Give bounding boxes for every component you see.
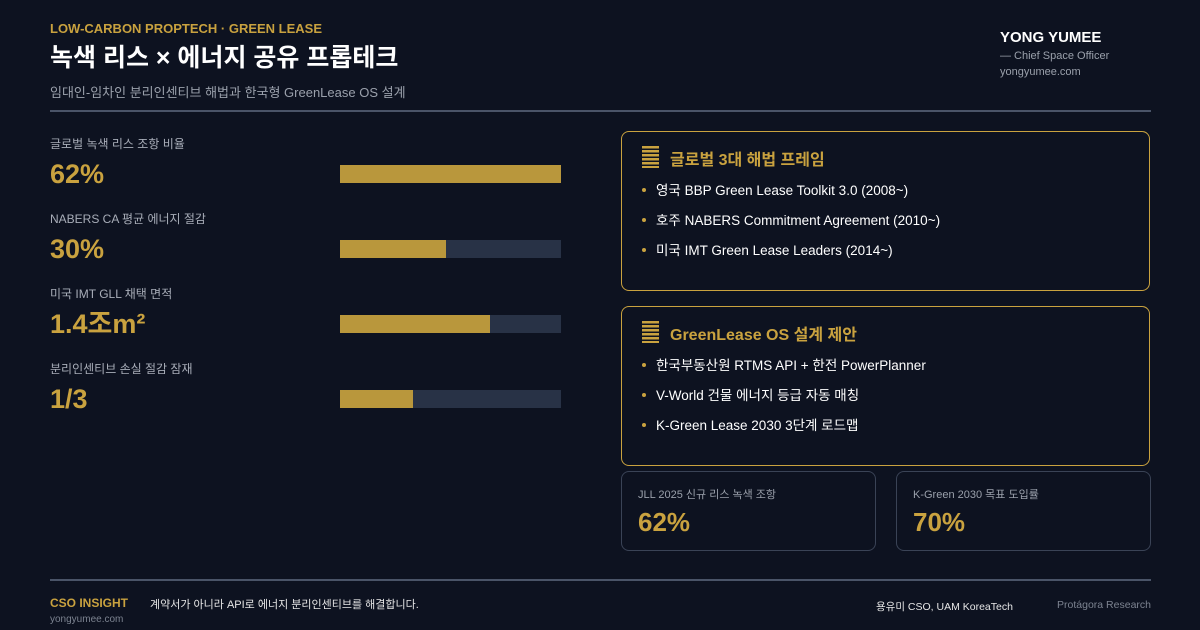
footer: Protágora Research: [1057, 599, 1151, 611]
stat 2: [50, 212, 206, 264]
footer: 계약서가 아니라 API로 에너지 분리인센티브를 해결합니다.: [150, 599, 419, 611]
stat 1: [50, 137, 185, 189]
stat card: K-Green: K-Green 2030 목표 도입률: [913, 489, 1039, 501]
heading: GreenLease OS 설계 제안: [670, 327, 857, 344]
panel: global frameworks: 영국 BBP Green Lease Toolkit 3.0 (2008~): [656, 183, 908, 198]
panel: GreenLease OS: [621, 306, 1150, 466]
stat card: JLL: 62%: [638, 507, 690, 537]
footer: 용유미 CSO, UAM KoreaTech: [876, 601, 1013, 613]
icon: list: [642, 146, 659, 168]
heading: 글로벌 3대 해법 프레임: [670, 152, 825, 169]
stat card: K-Green: [896, 471, 1151, 551]
footer: CSO INSIGHT: [50, 596, 128, 610]
author block: — Chief Space Officer: [1000, 50, 1109, 62]
stat 4: [50, 362, 192, 414]
stat 1: 62%: [50, 159, 104, 189]
bar 1: [340, 165, 561, 183]
stat card: JLL: [621, 471, 876, 551]
author block: yongyumee.com: [1000, 66, 1081, 78]
stat 3: [50, 287, 172, 339]
stat 4: 분리인센티브 손실 절감 잠재: [50, 362, 192, 376]
title: 녹색 리스 × 에너지 공유 프롭테크: [50, 44, 398, 72]
stat 2: NABERS CA 평균 에너지 절감: [50, 212, 206, 226]
icon: list: [642, 321, 659, 343]
bar 2: [340, 240, 561, 258]
stat card: K-Green: 70%: [913, 507, 965, 537]
subtitle: 임대인-임차인 분리인센티브 해법과 한국형 GreenLease OS 설계: [50, 85, 406, 100]
panel: GreenLease OS: 한국부동산원 RTMS API + 한전 PowerPlanner: [656, 358, 926, 373]
stat 3: 1.4조m²: [50, 309, 145, 339]
stat 4: 1/3: [50, 384, 88, 414]
stat card: JLL: JLL 2025 신규 리스 녹색 조항: [638, 489, 776, 501]
stat 2: 30%: [50, 234, 104, 264]
panel: global frameworks: [621, 131, 1150, 291]
footer: [50, 596, 1151, 625]
stat 3: 미국 IMT GLL 채택 면적: [50, 287, 172, 301]
author block: YONG YUMEE: [1000, 29, 1101, 46]
panel: global frameworks: 호주 NABERS Commitment Agreement (2010~): [656, 213, 940, 228]
panel: GreenLease OS: V-World 건물 에너지 등급 자동 매칭: [656, 388, 859, 403]
panel: GreenLease OS: K-Green Lease 2030 3단계 로드맵: [656, 418, 858, 433]
bar 4: [340, 390, 561, 408]
bar 3: [340, 315, 561, 333]
kicker: LOW-CARBON PROPTECH · GREEN LEASE: [50, 21, 322, 36]
footer: yongyumee.com: [50, 614, 123, 625]
stat 1: 글로벌 녹색 리스 조항 비율: [50, 137, 185, 151]
author block: [1000, 29, 1110, 78]
panel: global frameworks: 미국 IMT Green Lease Leaders (2014~): [656, 243, 893, 258]
